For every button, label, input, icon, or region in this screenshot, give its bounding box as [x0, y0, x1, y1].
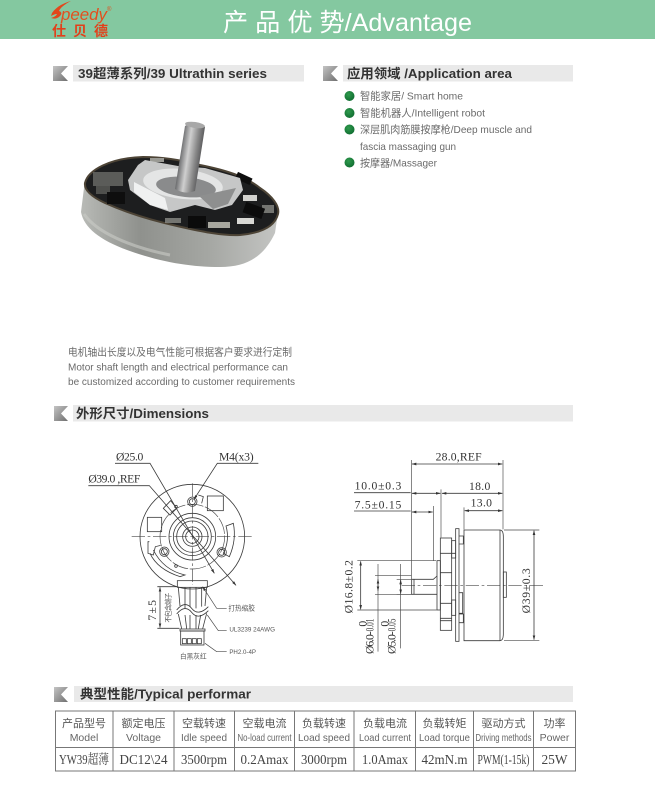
callout labels: 白黑灰红 — [180, 651, 207, 660]
wires and connector — [177, 581, 208, 645]
callout labels: 打热缩胶 — [228, 604, 255, 613]
leader: M4: M4(x3) — [219, 451, 254, 464]
dimension diameter 5.0 — [379, 564, 412, 654]
performance table: 空载转速 — [182, 716, 226, 730]
section heading: Application area: 应用领域 /Application area — [347, 66, 513, 81]
performance table: 3000rpm — [301, 752, 347, 767]
performance table: 驱动方式 — [482, 716, 526, 730]
section heading: Typical performance: 典型性能/Typical performar — [80, 686, 251, 702]
caption text: Motor shaft length and electrical performance can — [68, 362, 288, 374]
dimension 7.5 and 13.0 — [354, 496, 502, 561]
dimension diameter 5.0: Ø5.0- — [386, 631, 399, 654]
performance table: YW39超薄 — [59, 751, 109, 767]
logo: Speedy: 仕贝德 — [52, 23, 108, 39]
section heading: 39 Ultrathin series — [53, 65, 304, 82]
dimension 28.0 REF — [411, 451, 503, 579]
performance table: 空载电流 — [242, 716, 286, 730]
section heading: Typical performance — [54, 686, 573, 702]
logo: Speedy: peedy — [60, 5, 108, 24]
dimension drawing: front view — [88, 451, 275, 660]
performance table: DC12\24 — [120, 752, 168, 767]
performance table: Load speed — [298, 732, 350, 744]
dimension diameter 39: Ø39±0.3 — [520, 568, 533, 613]
performance table: 42mN.m — [422, 752, 468, 767]
caption text: 电机轴出长度以及电气性能可根据客户要求进行定制 — [68, 346, 292, 358]
dimension 10.0 and 18.0 — [354, 480, 502, 537]
logo: Speedy: ® — [107, 6, 112, 13]
dimension diameter 5.0: 0 — [379, 621, 392, 627]
dimension 10.0 and 18.0: 10.0±0.3 — [355, 480, 402, 493]
dimension diameter 6.0: 0 — [357, 621, 370, 627]
application list: 按摩器/Massager — [360, 156, 437, 170]
motor body — [412, 529, 506, 641]
performance table: 负载转速 — [302, 716, 346, 730]
application list: 深层肌肉筋膜按摩枪/Deep muscle and — [360, 123, 532, 136]
performance table: 额定电压 — [122, 716, 166, 730]
leader: diameter 25 — [115, 451, 214, 573]
dimension diameter 5.0: 0.05 — [386, 619, 399, 631]
performance table: Driving methods — [476, 732, 532, 744]
dimension diameter 6.0: Ø6.0- — [364, 631, 377, 654]
performance table: 产品型号 — [62, 716, 106, 730]
performance table: No-load current — [238, 732, 292, 744]
dimension diameter 6.0 — [357, 564, 412, 654]
performance table: Idle speed — [181, 732, 227, 744]
logo: Speedy — [51, 1, 112, 39]
section heading: Application area — [323, 65, 573, 82]
performance table — [56, 711, 576, 771]
leader: M4 — [194, 451, 258, 499]
performance table: 3500rpm — [181, 752, 227, 767]
performance table: Model — [70, 732, 98, 744]
section heading: 39 Ultrathin series: 39超薄系列/39 Ultrathin series — [78, 66, 267, 81]
performance table: 负载电流 — [363, 716, 407, 730]
callout labels: UL3239 24AWG — [229, 627, 275, 634]
dimension drawing: side view — [343, 451, 545, 654]
motor photo — [81, 121, 278, 267]
leader: diameter 25: Ø25.0 — [116, 451, 144, 464]
callout labels — [180, 587, 275, 660]
callout labels: PH2.0-4P — [229, 649, 257, 656]
caption text: be customized according to customer requirements — [68, 376, 295, 388]
performance table: Voltage — [126, 732, 161, 744]
dimension diameter 39 — [504, 530, 539, 640]
performance table: Load current — [359, 732, 411, 744]
application list: 智能家居/ Smart home — [360, 90, 463, 102]
performance table: Load torque — [419, 732, 470, 744]
performance table: 25W — [542, 752, 568, 767]
dimension 7 +/- 5: 不包含端子 — [163, 592, 172, 623]
leader: diameter 39 — [88, 473, 236, 585]
performance table: PWM(1-15k) — [478, 752, 530, 767]
dimension 7 +/- 5: 7±5 — [146, 600, 159, 621]
section heading: Dimensions — [54, 405, 573, 422]
performance table: 1.0Amax — [362, 752, 408, 767]
page title: 产 品 优 势/Advantage — [223, 9, 472, 37]
performance table: 0.2Amax — [240, 752, 289, 767]
dimension 7.5 and 13.0: 7.5±0.15 — [355, 498, 402, 511]
dimension 10.0 and 18.0: 18.0 — [469, 480, 491, 493]
dimension 7 +/- 5 — [146, 587, 179, 628]
performance table: 功率 — [544, 716, 566, 730]
performance table: Power — [540, 732, 570, 744]
application list: fascia massaging gun — [360, 141, 456, 153]
application list: 智能机器人/Intelligent robot — [360, 106, 485, 120]
performance table: 负载转矩 — [422, 716, 466, 730]
dimension diameter 6.0: 0.01 — [364, 619, 377, 631]
dimension diameter 16.8 — [343, 560, 437, 613]
leader: diameter 39: Ø39.0 ,REF — [88, 473, 141, 486]
dimension 28.0 REF: 28.0,REF — [436, 451, 482, 464]
header band — [0, 0, 655, 39]
dimension diameter 16.8: Ø16.8±0.2 — [343, 560, 356, 613]
caption text — [68, 346, 295, 388]
section heading: Dimensions: 外形尺寸/Dimensions — [76, 406, 209, 421]
dimension 7.5 and 13.0: 13.0 — [471, 496, 492, 509]
application list — [344, 90, 532, 170]
